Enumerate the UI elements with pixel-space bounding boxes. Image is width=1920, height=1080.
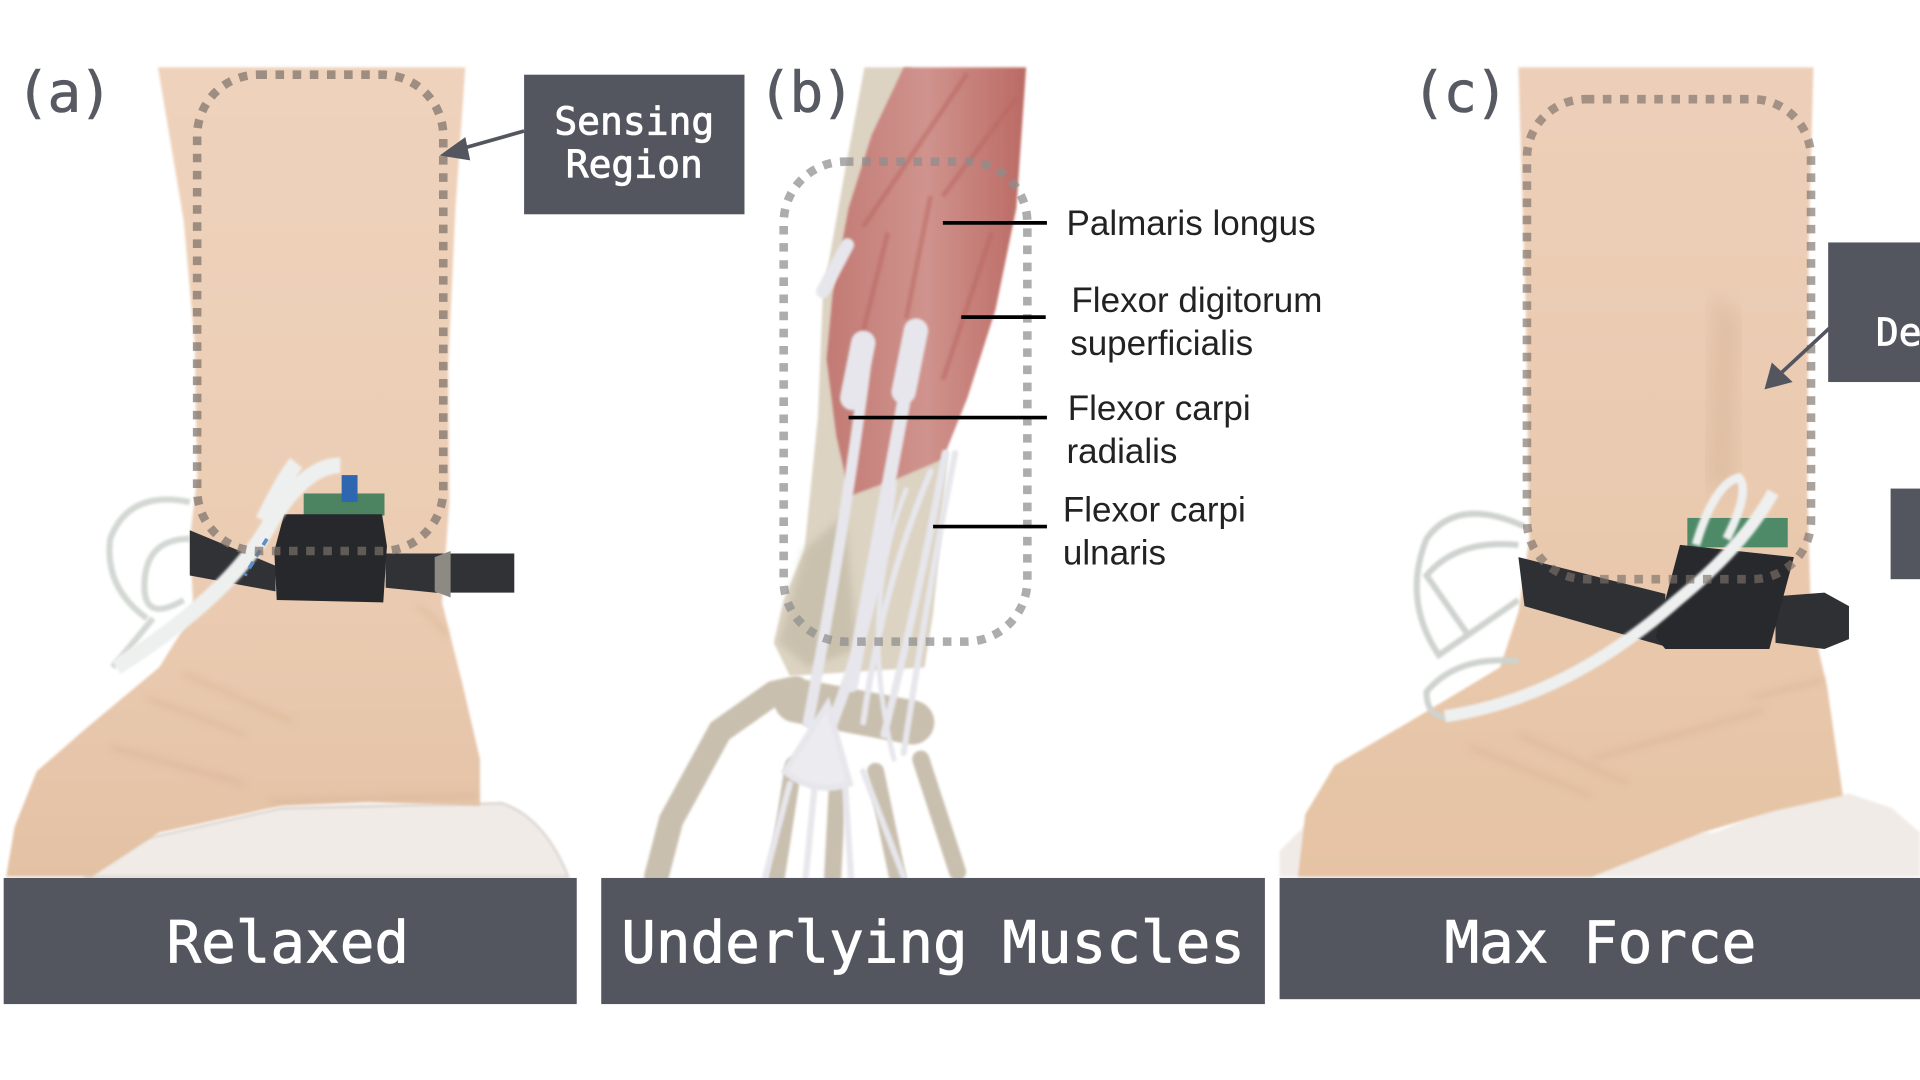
panel label (a): (a) bbox=[16, 60, 110, 125]
hand bones bbox=[656, 688, 958, 877]
caption bar: Relaxed: Relaxed bbox=[166, 909, 409, 976]
muscle label: Flexor digitorum superficialis: superficialis bbox=[1070, 324, 1253, 363]
callout: clipped small box bbox=[1891, 489, 1920, 579]
muscle label: Flexor carpi radialis bbox=[849, 389, 1251, 471]
panel: max force ankle photo bbox=[1280, 67, 1920, 877]
caption bar: Max Force: Max Force bbox=[1444, 909, 1756, 976]
sensing region dotted outline bbox=[197, 75, 443, 551]
panel: underlying muscles illustration bbox=[656, 67, 1027, 877]
ribbon loops bbox=[1417, 514, 1524, 717]
leg and foot bbox=[1298, 67, 1843, 877]
sensor box bbox=[1656, 545, 1794, 649]
muscle label: Flexor digitorum superficialis bbox=[961, 281, 1322, 363]
sensor board bbox=[304, 475, 384, 516]
buckle bbox=[435, 551, 451, 598]
muscle label: Palmaris longus: Palmaris longus bbox=[1067, 204, 1316, 243]
deformation arrow bbox=[1764, 328, 1829, 389]
muscle label: Flexor carpi ulnaris: Flexor carpi bbox=[1063, 491, 1246, 530]
foot creases bbox=[1469, 680, 1824, 796]
callout: sensing region: Sensing bbox=[554, 100, 714, 144]
sensing region dotted outline bbox=[784, 162, 1027, 642]
sensing region dotted outline bbox=[1527, 99, 1811, 579]
muscle label: Flexor carpi radialis: radialis bbox=[1067, 432, 1177, 471]
strap bbox=[190, 530, 514, 593]
ribbon cable bbox=[116, 463, 340, 667]
ribbon loop left bbox=[109, 500, 190, 667]
panel: relaxed ankle photo bbox=[6, 67, 568, 877]
muscle label: Flexor digitorum superficialis: Flexor digitorum bbox=[1071, 281, 1322, 320]
panel label (c): (c) bbox=[1412, 60, 1506, 125]
caption bar: Max Force bbox=[1280, 878, 1920, 999]
callout: sensing region bbox=[524, 75, 744, 214]
callout: sensing region: Region bbox=[566, 143, 703, 187]
tendons bbox=[765, 245, 955, 877]
caption bar: Relaxed bbox=[4, 878, 577, 1004]
caption bar: Underlying Muscles: Underlying Muscles bbox=[621, 909, 1245, 976]
callout: clipped right bbox=[1828, 242, 1920, 382]
panel label (b): (b) bbox=[758, 60, 852, 125]
white support block bbox=[86, 803, 568, 877]
tendon shadow bbox=[1708, 294, 1739, 490]
forearm bones bbox=[774, 67, 948, 676]
white support block bbox=[1280, 793, 1920, 877]
ribbon cable bbox=[1445, 478, 1773, 716]
foot creases bbox=[110, 606, 478, 802]
forearm muscles bbox=[827, 67, 1026, 496]
muscle label: Flexor carpi ulnaris: ulnaris bbox=[1063, 533, 1166, 572]
arrow: sensing region bbox=[440, 131, 524, 160]
sensor box bbox=[274, 514, 387, 602]
muscle fibres bbox=[863, 73, 1016, 380]
muscle label: Flexor carpi ulnaris bbox=[933, 491, 1246, 572]
strap bbox=[1518, 557, 1849, 649]
sensor board bbox=[1687, 518, 1788, 547]
caption bar: Underlying Muscles bbox=[601, 878, 1265, 1004]
leg and foot bbox=[6, 67, 480, 877]
muscle label: Flexor carpi radialis: Flexor carpi bbox=[1068, 389, 1251, 428]
